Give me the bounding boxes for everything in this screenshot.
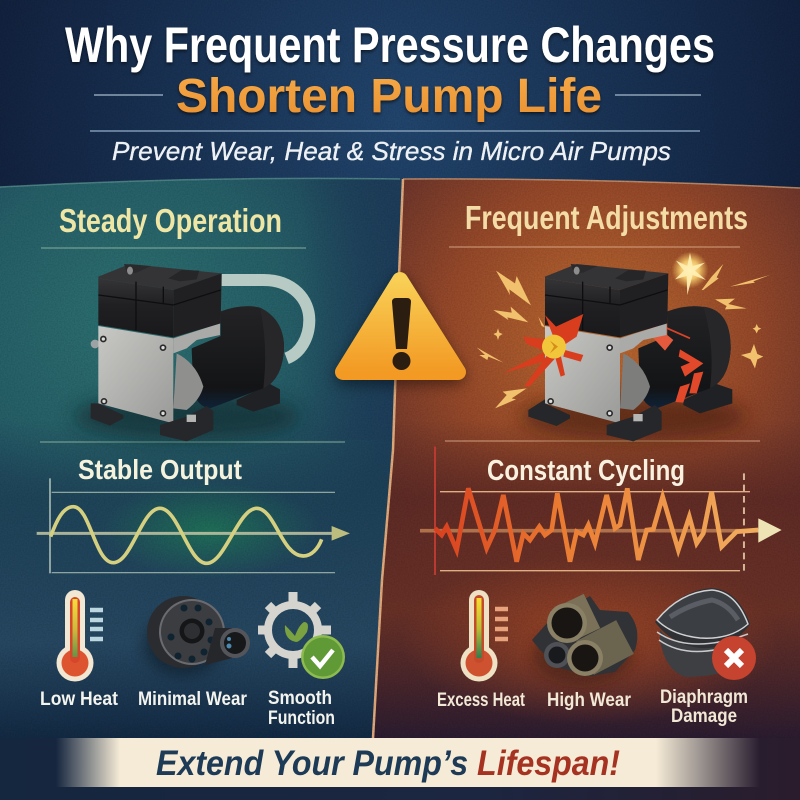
bottom banner — [0, 738, 800, 800]
yellow bolt head — [542, 335, 566, 359]
title line 2: Shorten Pump Life — [176, 70, 602, 123]
banner slogan: Extend Your Pump’s Lifespan! — [156, 744, 620, 783]
background: right rust panel — [373, 179, 800, 738]
background: left lower fade — [0, 420, 394, 738]
chart: constant cycling — [420, 447, 782, 575]
divider between panels — [373, 179, 403, 738]
icon: minimal wear flange — [143, 596, 250, 675]
red impact burst — [503, 314, 583, 387]
label: damage: Damage — [671, 706, 737, 727]
icon: high wear cylinders — [532, 596, 637, 683]
label: excess heat: Excess Heat — [437, 690, 526, 711]
background: stable chart glow — [100, 482, 320, 578]
icon: smooth function gear — [258, 592, 345, 679]
label: diaphragm: Diaphragm — [660, 687, 748, 708]
chart: stable output wave — [37, 478, 350, 573]
background: left panel navy edge — [300, 180, 403, 440]
title block — [65, 17, 715, 166]
pump: steady — [73, 264, 309, 441]
pump: stressed — [520, 264, 747, 441]
warning triangle — [343, 280, 458, 376]
heading: steady operation: Steady Operation — [59, 202, 282, 239]
chart heading: stable output: Stable Output — [78, 454, 242, 485]
label: minimal wear: Minimal Wear — [138, 689, 248, 710]
background: right icon glow — [400, 555, 780, 725]
lightning bolts — [477, 264, 770, 408]
spark flash — [672, 252, 708, 295]
label: smooth: Smooth — [268, 688, 332, 709]
chart heading: constant cycling: Constant Cycling — [487, 455, 685, 487]
label: function: Function — [268, 708, 335, 729]
sparks and burst around stressed pump — [477, 252, 770, 408]
background: right lower fade — [373, 420, 800, 738]
icon: excess heat thermometer — [460, 590, 508, 682]
icon: diaphragm damage — [655, 588, 756, 680]
labels: left icons — [40, 688, 335, 729]
subtitle: Prevent Wear, Heat & Stress in Micro Air Pumps — [112, 136, 671, 166]
label: high wear: High Wear — [547, 690, 632, 711]
background: left teal panel — [0, 178, 403, 738]
labels: right icons — [437, 687, 748, 727]
label: low heat: Low Heat — [40, 689, 119, 710]
icon: low heat thermometer — [56, 590, 103, 682]
